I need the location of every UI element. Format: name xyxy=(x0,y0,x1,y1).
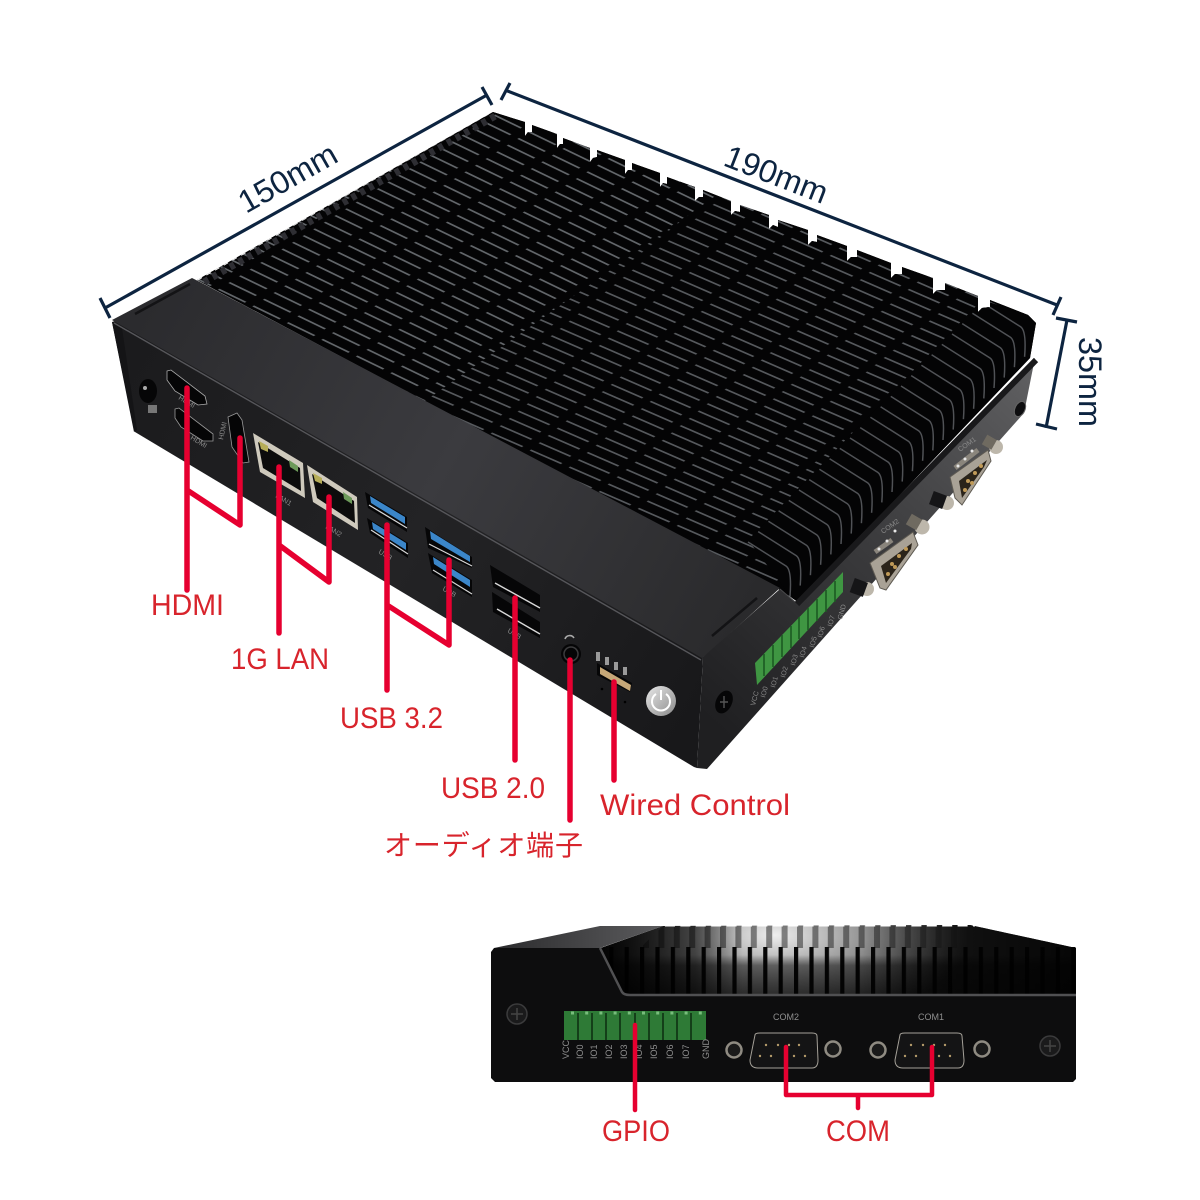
side terminal block: GPIO: IO5 xyxy=(809,636,819,649)
heat sink fins xyxy=(190,100,1050,610)
port: USB 2.0 pair: USB xyxy=(506,628,522,641)
rear terminal block: GPIO xyxy=(564,1011,706,1040)
GPIO pin labels: IO2 xyxy=(604,1044,614,1059)
side terminal block: GPIO: IO2 xyxy=(780,666,790,679)
callout: Wired Control: Wired Control xyxy=(600,789,790,822)
icon: power button xyxy=(646,686,676,716)
callout: USB 3.2: USB 3.2 xyxy=(340,702,443,735)
GPIO pin labels: IO4 xyxy=(634,1044,644,1059)
port: HDMI 2: HDMI xyxy=(189,435,208,450)
callout: 1G LAN xyxy=(231,467,329,676)
front face xyxy=(112,320,703,768)
side terminal block: GPIO xyxy=(750,572,848,707)
GPIO pin labels: IO1 xyxy=(589,1044,599,1059)
callout: HDMI xyxy=(151,388,240,622)
rear connector nuts xyxy=(726,1042,990,1058)
side connector: COM 2: COM2 xyxy=(880,518,901,536)
dimension: 35mm: 35mm xyxy=(1072,337,1108,427)
port: USB 3.2 pair B: USB xyxy=(441,586,457,599)
port: USB 3.2 pair A xyxy=(365,492,408,562)
rear top plate xyxy=(494,926,663,948)
side screw upper xyxy=(1012,400,1028,418)
port: LAN 1: LAN1 xyxy=(274,493,293,508)
rear connector: COM1 xyxy=(895,1012,964,1068)
side terminal block: GPIO: IO1 xyxy=(770,676,780,689)
port: LAN 1 xyxy=(253,433,305,508)
side terminal block: GPIO: IO0 xyxy=(760,686,770,699)
port: DC power jack xyxy=(139,379,157,413)
side terminal block: GPIO: IO3 xyxy=(790,654,800,667)
port: HDMI vertical xyxy=(218,413,249,463)
rear body xyxy=(491,948,1076,1082)
side connector: COM 2 xyxy=(850,514,930,597)
GPIO pin labels: IO3 xyxy=(619,1044,629,1059)
callout: COM xyxy=(786,1047,932,1148)
side connector: COM 1: COM1 xyxy=(957,436,978,454)
GPIO pin labels: IO5 xyxy=(649,1044,659,1059)
port: HDMI 1 xyxy=(167,370,207,410)
port: USB 3.2 pair A: USB xyxy=(377,549,393,562)
port: HDMI 2 xyxy=(175,408,213,450)
callout: audio jack: オーディオ端子 xyxy=(384,830,583,861)
dimension: 190mm: 190mm xyxy=(719,138,833,211)
side screw xyxy=(712,688,736,716)
GPIO pin labels: VCC xyxy=(561,1039,571,1059)
port: audio jack xyxy=(561,636,581,664)
dimension: 150mm xyxy=(100,87,492,318)
GPIO pin labels: IO0 xyxy=(575,1044,585,1059)
port: USB 3.2 pair B xyxy=(425,527,472,599)
side connector: COM 1 xyxy=(929,435,1003,510)
GPIO pin labels: GND xyxy=(701,1038,711,1059)
callout: HDMI: HDMI xyxy=(151,589,224,622)
port: HDMI 1: HDMI xyxy=(177,395,196,410)
side face xyxy=(697,358,1035,769)
rear fins xyxy=(598,925,1076,997)
rear connector: COM2 xyxy=(750,1012,818,1068)
rear screws xyxy=(507,1004,1060,1056)
top plate xyxy=(112,278,780,658)
main device photo xyxy=(112,100,1050,769)
side terminal block: GPIO: IO6 xyxy=(817,626,827,639)
dimension: 150mm: 150mm xyxy=(232,136,343,220)
dimension: 190mm xyxy=(501,83,1061,315)
callout: USB 3.2 xyxy=(340,525,449,735)
port: LAN 2: LAN2 xyxy=(324,524,343,539)
port: LAN 2 xyxy=(307,465,358,539)
rear device photo xyxy=(491,925,1076,1082)
left end cap xyxy=(112,322,137,432)
GPIO pin labels: IO6 xyxy=(665,1044,675,1059)
callout: GPIO xyxy=(602,1025,670,1148)
GPIO pin labels: IO7 xyxy=(681,1044,691,1059)
rear connector: COM1: COM1 xyxy=(918,1012,944,1022)
callout: COM: COM xyxy=(826,1115,890,1148)
port: HDMI vertical: HDMI xyxy=(218,421,229,440)
callout: GPIO: GPIO xyxy=(602,1115,670,1148)
side terminal block: GPIO: VCC xyxy=(750,690,761,707)
callout: 1G LAN: 1G LAN xyxy=(231,643,329,676)
side terminal block: GPIO: IO4 xyxy=(799,646,809,659)
GPIO pin labels xyxy=(561,1038,711,1059)
rear connector: COM2: COM2 xyxy=(773,1012,799,1022)
callout: USB 2.0: USB 2.0 xyxy=(441,772,545,805)
port: wired control connector xyxy=(596,652,632,703)
dimension: 35mm xyxy=(1036,318,1108,429)
port: USB 2.0 pair xyxy=(490,565,540,641)
side terminal block: GPIO: GND xyxy=(837,604,848,621)
side terminal block: GPIO: IO7 xyxy=(827,615,837,628)
